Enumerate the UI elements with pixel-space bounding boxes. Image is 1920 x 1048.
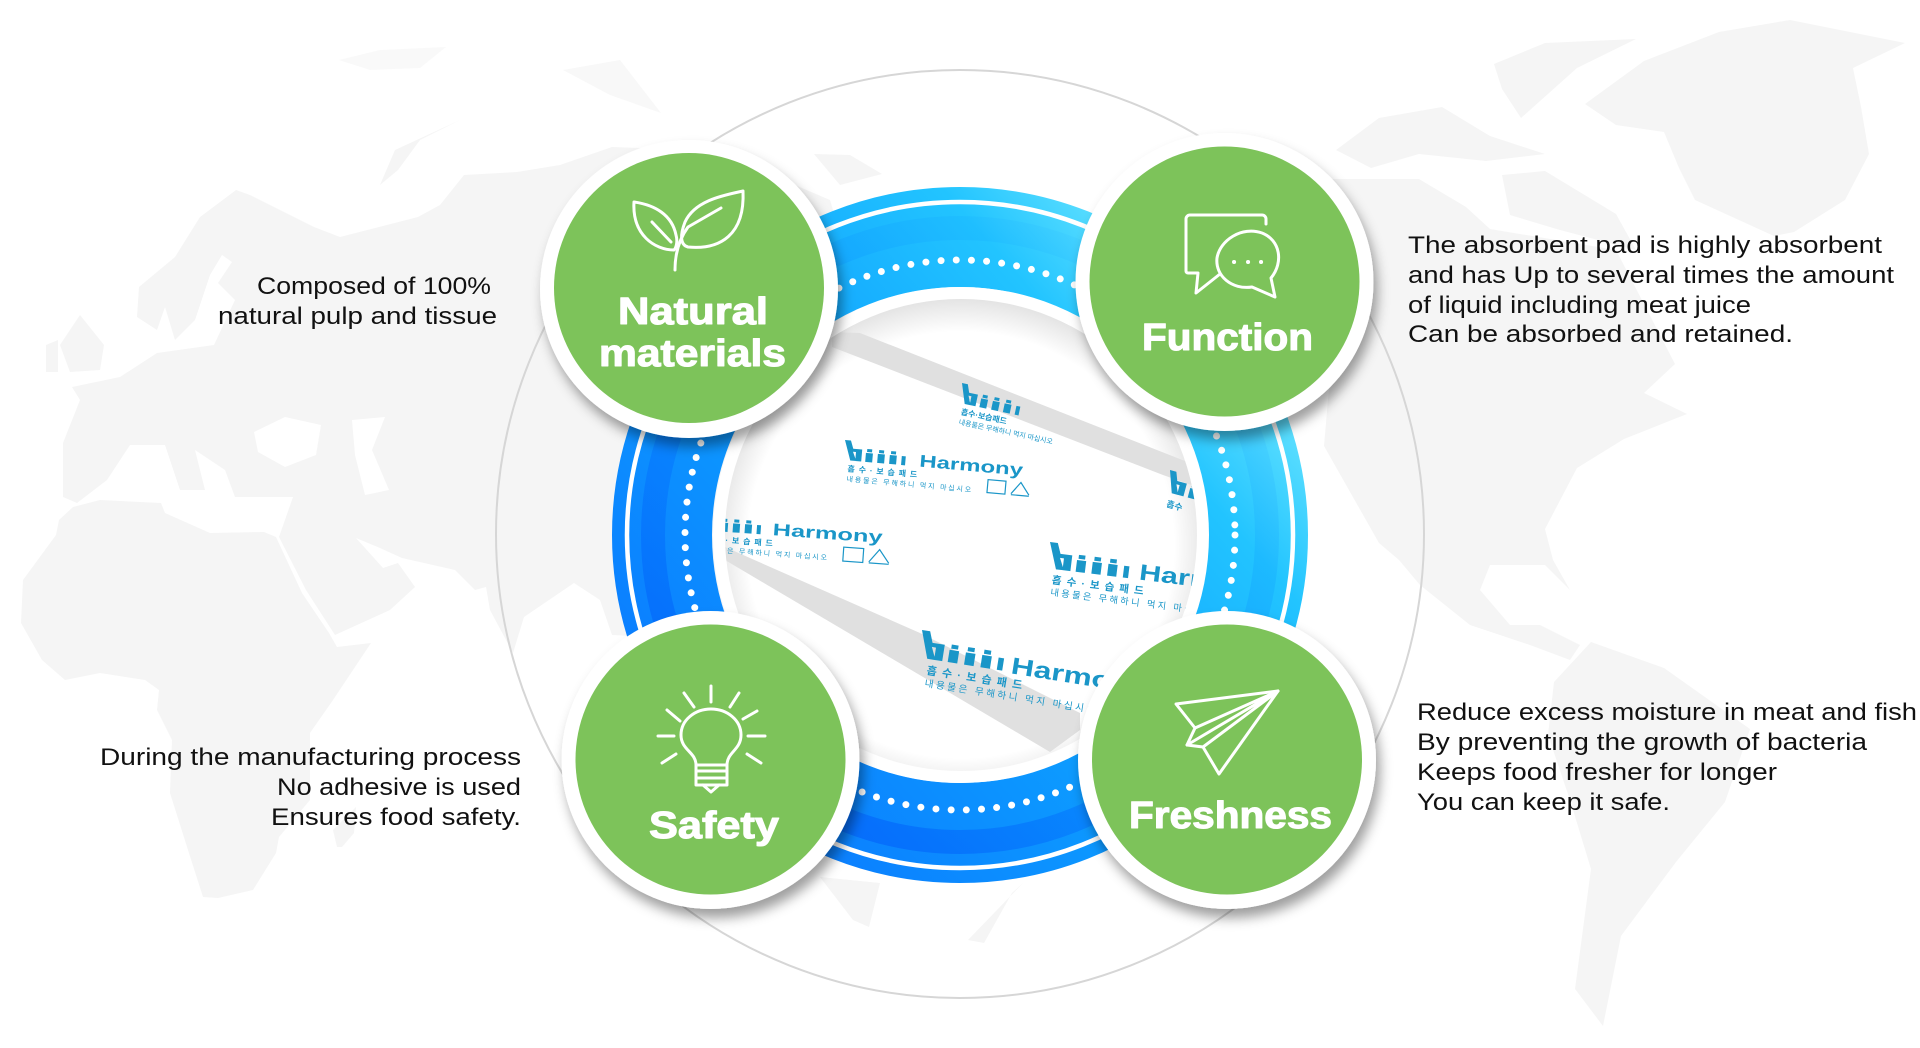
badge: Freshness xyxy=(1078,611,1376,909)
logo and label 1: 흡수·보습패드 xyxy=(847,463,918,479)
label: Natural materials: Natural xyxy=(618,291,768,333)
logo and label 4: 흡수·보습패드 xyxy=(926,663,1023,692)
badge: Function xyxy=(1076,133,1374,431)
label: Natural materials: materials xyxy=(599,333,786,375)
logo and label 3 xyxy=(1050,542,1194,612)
text: function description: The absorbent pad is highly absorbent xyxy=(1408,232,1882,259)
logo and label 4: Harmony xyxy=(1009,653,1150,700)
logo and label 2 xyxy=(725,518,890,565)
logo and label 3: 내용물은 무해하니 먹지 마십시오 xyxy=(1050,586,1215,617)
icon: speech bubbles xyxy=(1186,215,1279,297)
label: Natural materials xyxy=(599,291,786,375)
text: safety description: Ensures food safety. xyxy=(271,804,521,831)
text: natural materials description xyxy=(218,273,497,330)
pad strips xyxy=(725,332,1197,752)
text: freshness description xyxy=(1417,699,1917,816)
icon: leaves xyxy=(634,191,743,270)
text: freshness description: By preventing the growth of bacteria xyxy=(1417,729,1868,756)
label: Freshness: Freshness xyxy=(1129,795,1332,837)
icon: paper plane xyxy=(1176,691,1278,774)
logo and label 2: 흡수·보습패드 xyxy=(703,533,774,548)
text: safety description xyxy=(100,744,521,831)
logo and label 4: 내용물은 무해하니 먹지 마십시오 xyxy=(924,677,1096,716)
text: freshness description: You can keep it safe. xyxy=(1417,789,1670,816)
text: freshness description: Reduce excess moisture in meat and fish xyxy=(1417,699,1917,726)
logo and label 2: 내용물은 무해하니 먹지 마십시오 xyxy=(702,544,828,562)
label: Safety: Safety xyxy=(649,805,779,847)
label: Function: Function xyxy=(1142,317,1313,359)
logo 6: 흡수 xyxy=(1165,499,1184,513)
logo and label 1 xyxy=(841,440,1032,499)
blue ring xyxy=(627,202,1293,868)
text: natural materials description: natural pulp and tissue xyxy=(218,303,497,330)
text: safety description: During the manufacturing process xyxy=(100,744,521,771)
logo and label 3: 흡수·보습패드 xyxy=(1051,573,1145,598)
logo and label 2: Harmony xyxy=(772,520,884,547)
badge: Safety xyxy=(562,611,860,909)
logo and label 4 xyxy=(922,630,1104,712)
text: function description: and has Up to several times the amount xyxy=(1408,262,1894,289)
logo and label 1: 내용물은 무해하니 먹지 마십시오 xyxy=(846,474,972,494)
logo and label 5: 흡수·보습패드 xyxy=(960,407,1009,426)
text: function description: Can be absorbed and retained. xyxy=(1408,321,1793,348)
text: safety description: No adhesive is used xyxy=(277,774,521,801)
center product photo xyxy=(713,287,1209,783)
text: function description xyxy=(1408,232,1894,348)
icon: light bulb xyxy=(658,686,765,792)
logo and label 5 xyxy=(959,383,1052,444)
text: freshness description: Keeps food fresher for longer xyxy=(1417,759,1777,786)
badge: Natural materials xyxy=(540,140,838,438)
text: natural materials description: Composed of 100% xyxy=(257,273,491,300)
logo and label 1: Harmony xyxy=(919,452,1025,480)
logo 6 xyxy=(1166,470,1194,511)
logo and label 3: Harmony xyxy=(1138,560,1273,601)
logo and label 5: 내용물은 무해하니 먹지 마십시오 xyxy=(958,417,1054,446)
outer thin circle xyxy=(496,70,1424,998)
text: function description: of liquid including meat juice xyxy=(1408,292,1751,319)
